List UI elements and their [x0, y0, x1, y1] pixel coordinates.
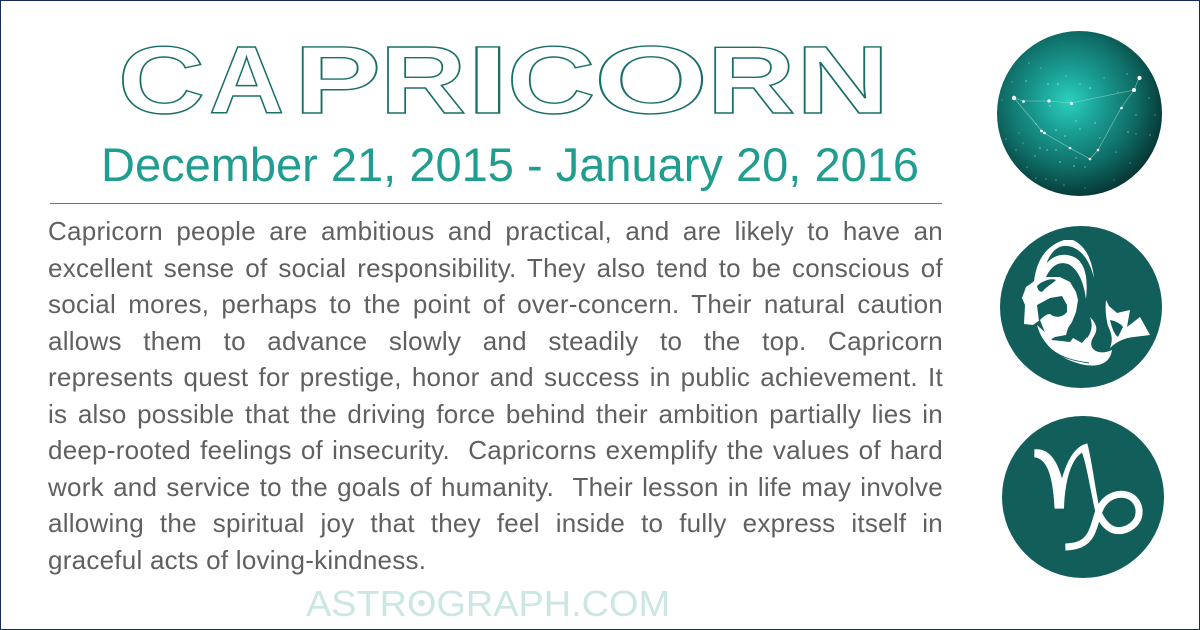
title: CAPRICORN: C	[507, 27, 595, 134]
date range heading: December 21, 2015 - January 20, 2016	[101, 138, 919, 191]
title: CAPRICORN: N	[796, 27, 890, 134]
body text: graceful acts of loving-kindness.	[48, 544, 426, 574]
goat body crescent	[1037, 325, 1112, 366]
title: CAPRICORN: R	[707, 27, 795, 134]
title: CAPRICORN: C	[118, 27, 205, 134]
body text: allowing the spiritual joy that they feel inside to fully express itself in	[48, 508, 943, 538]
constellation stars	[1012, 76, 1142, 160]
body text: is also possible that the driving force behind their ambition partially lies in	[48, 398, 943, 428]
icon: capricorn glyph	[1002, 416, 1164, 578]
title: CAPRICORN	[118, 26, 890, 134]
tail flame	[1086, 317, 1112, 358]
logo: dot inside the O of the wordmark	[306, 583, 670, 624]
body text: work and service to the goals of humanity. Their lesson in life may involve	[48, 472, 943, 502]
goat face details	[1037, 279, 1067, 321]
crescent inner line	[1052, 350, 1089, 363]
title: CAPRICORN: P	[294, 27, 381, 134]
goat head and mane	[1022, 277, 1078, 340]
constellation lines	[1014, 78, 1139, 159]
title: CAPRICORN: R	[380, 26, 466, 133]
icon: constellation globe	[997, 31, 1162, 196]
body text: excellent sense of social responsibility. They also tend to be conscious of	[48, 252, 943, 282]
body text: Capricorn people are ambitious and practical, and are likely to have an	[48, 216, 943, 246]
body text: social mores, perhaps to the point of over-concern. Their natural caution	[48, 289, 943, 319]
title: CAPRICORN: I	[466, 26, 510, 134]
fin details	[1110, 320, 1123, 337]
title: CAPRICORN: O	[594, 27, 708, 134]
body text: deep-rooted feelings of insecurity. Capricorns exemplify the values of hard	[48, 435, 943, 465]
title: CAPRICORN: A	[209, 27, 284, 134]
glyph stem	[1034, 443, 1099, 520]
body text	[48, 216, 943, 574]
glyph tail and loop	[1065, 494, 1139, 547]
wordmark: ASTROGRAPH.COM	[306, 583, 670, 624]
body text: represents quest for prestige, honor and success in public achievement. It	[48, 362, 943, 392]
goat horns	[1034, 240, 1094, 299]
tail fin	[1106, 300, 1150, 348]
body text: allows them to advance slowly and steadily to the top. Capricorn	[48, 326, 943, 356]
background stars	[1001, 62, 1156, 189]
icon: sea-goat	[1000, 226, 1162, 388]
